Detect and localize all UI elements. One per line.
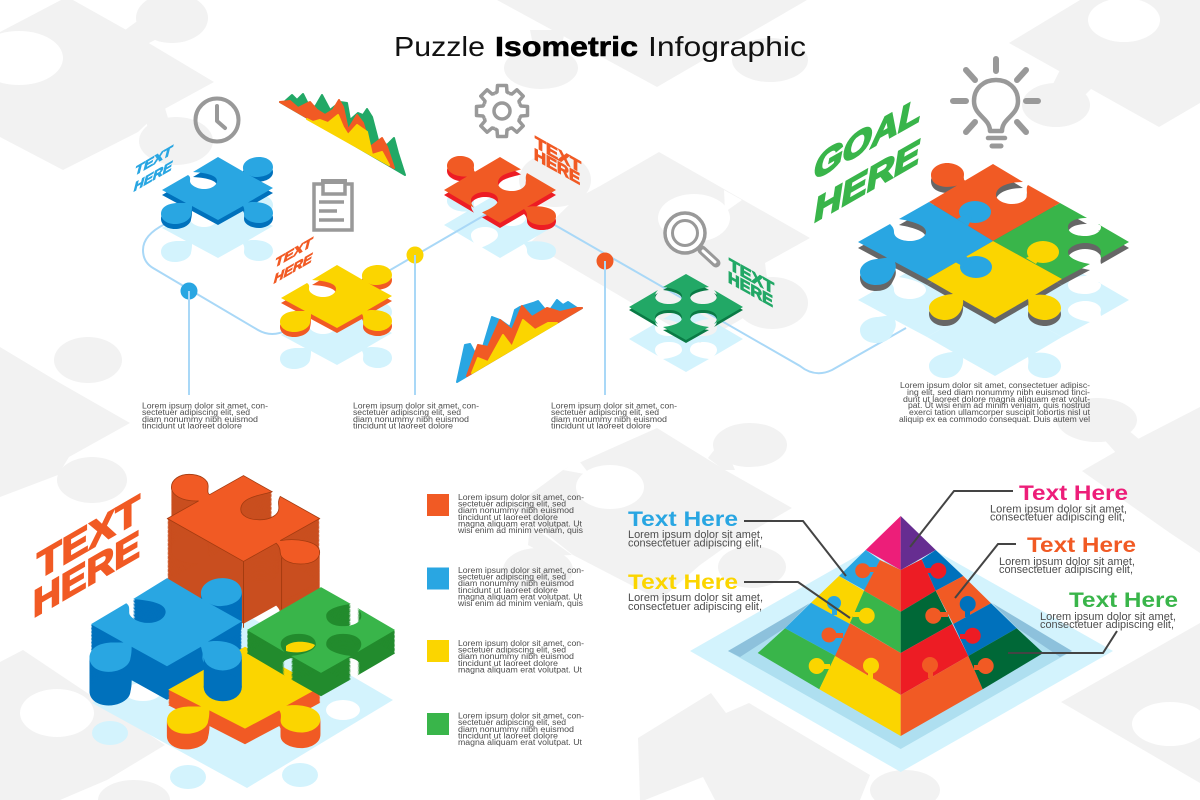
legend: yellow: sectetuer adipiscing elit, sed xyxy=(458,646,566,654)
text block: goal xyxy=(899,381,1091,424)
text block: goal: dunt ut laoreet dolore magna aliquam erat volut- xyxy=(903,395,1090,404)
icon: clock xyxy=(196,98,238,142)
label: orange text here right: HERE xyxy=(534,144,580,188)
icon: magnifier xyxy=(665,213,716,263)
legend: blue: sectetuer adipiscing elit, sed xyxy=(458,572,566,582)
text block: step 1: sectetuer adipiscing elit, sed xyxy=(142,408,250,417)
puzzle piece: green xyxy=(629,274,743,343)
text block: step 1: Lorem ipsum dolor sit amet, con- xyxy=(142,402,268,410)
legend: orange: diam nonummy nibh euismod xyxy=(458,506,574,515)
legend: yellow: diam nonummy nibh euismod xyxy=(458,652,574,661)
callout: yellow: Text Here xyxy=(628,571,738,594)
callout: yellow: consectetuer adipiscing elit, xyxy=(628,601,762,613)
legend: green: magna aliquam erat volutpat. Ut xyxy=(458,738,583,747)
text block: step 3: tincidunt ut laoreet dolore xyxy=(551,422,652,430)
callout: blue: Text Here xyxy=(628,508,738,531)
callout: pink: Text Here xyxy=(1019,482,1128,505)
text block: step 2: sectetuer adipiscing elit, sed xyxy=(353,408,461,417)
text block: step 1: tincidunt ut laoreet dolore xyxy=(142,422,243,430)
timeline marker: orange xyxy=(596,252,614,395)
label: orange text here left: HERE xyxy=(272,250,314,288)
connector path xyxy=(143,205,906,373)
legend: orange: magna aliquam erat volutpat. Ut xyxy=(458,520,583,528)
stack: yellow piece xyxy=(167,647,320,749)
goal heading: GOAL xyxy=(810,87,926,189)
puzzle piece: orange xyxy=(444,156,556,230)
leader lines xyxy=(744,491,1117,653)
text block: step 3: sectetuer adipiscing elit, sed xyxy=(551,408,659,417)
legend: blue: magna aliquam erat volutpat. Ut xyxy=(458,592,583,602)
legend: yellow: magna aliquam erat volutpat. Ut xyxy=(458,666,583,674)
callout: yellow xyxy=(628,571,763,613)
title: Isometric xyxy=(495,31,638,62)
stack heading: HERE xyxy=(33,522,140,626)
stack: yellow showing through green notch xyxy=(286,642,315,652)
legend: blue: tincidunt ut laoreet dolore xyxy=(458,586,559,595)
label: green text here: HERE xyxy=(728,267,773,311)
callout: pink xyxy=(990,482,1128,524)
label: green text here: TEXT xyxy=(729,254,775,298)
callout: green: consectetuer adipiscing elit, xyxy=(1040,619,1174,631)
callout: green: Text Here xyxy=(1069,589,1178,612)
legend: blue: diam nonummy nibh euismod xyxy=(458,579,574,588)
legend: green: Lorem ipsum dolor sit amet, con- xyxy=(458,712,584,720)
stack: orange cube xyxy=(167,474,320,628)
label: blue text here: HERE xyxy=(132,158,174,196)
stack: blue piece xyxy=(89,578,242,706)
icon: light bulb xyxy=(953,59,1038,146)
goal puzzle xyxy=(858,163,1129,326)
stack heading: TEXT xyxy=(37,486,140,588)
label: orange text here right: TEXT xyxy=(535,132,582,177)
legend: green: tincidunt ut laoreet dolore xyxy=(458,732,559,740)
label: blue text here: TEXT xyxy=(133,142,175,180)
text block: step 3 xyxy=(551,402,677,430)
goal heading xyxy=(810,87,926,231)
callout: orange xyxy=(999,534,1136,576)
legend: green xyxy=(427,712,584,747)
text block: step 2: Lorem ipsum dolor sit amet, con- xyxy=(353,402,479,410)
pyramid base xyxy=(690,531,1113,772)
puzzle piece: blue xyxy=(161,157,273,229)
text block: goal: pat. Ut wisi enim ad minim veniam, quis nostrud xyxy=(908,401,1090,410)
text block: goal: Lorem ipsum dolor sit amet, consectetuer adipisc- xyxy=(900,381,1090,390)
goal shadow xyxy=(858,221,1129,378)
icon: clipboard xyxy=(314,179,352,230)
text block: goal: aliquip ex ea commodo consequat. Duis autem vel xyxy=(899,415,1090,424)
goal heading: HERE xyxy=(812,132,923,231)
legend: orange: tincidunt ut laoreet dolore xyxy=(458,513,559,522)
callout: pink: consectetuer adipiscing elit, xyxy=(990,512,1125,524)
legend: yellow xyxy=(427,639,584,674)
text block: step 3: diam nonummy nibh euismod xyxy=(551,415,667,424)
callout: pink: Lorem ipsum dolor sit amet, xyxy=(990,504,1127,516)
timeline marker: blue xyxy=(180,282,198,395)
chart: rising area xyxy=(457,300,582,382)
callout: orange: consectetuer adipiscing elit, xyxy=(999,564,1133,576)
title xyxy=(394,31,806,62)
text block: step 3: Lorem ipsum dolor sit amet, con- xyxy=(551,402,677,410)
piece shadows xyxy=(161,191,743,372)
text block: step 2: tincidunt ut laoreet dolore xyxy=(353,422,454,430)
callout: yellow: Lorem ipsum dolor sit amet, xyxy=(628,592,763,604)
callout: blue xyxy=(628,508,763,550)
label: orange text here left: TEXT xyxy=(273,234,315,272)
icon: gear xyxy=(476,86,528,136)
stack shadow xyxy=(92,615,393,789)
text block: step 2 xyxy=(353,402,479,430)
text block: goal: ing elit, sed diam nonummy nibh euismod tinci- xyxy=(907,388,1090,397)
callout: green: Lorem ipsum dolor sit amet, xyxy=(1040,611,1176,623)
legend: blue xyxy=(427,566,584,608)
legend: blue: wisi enim ad minim veniam, quis xyxy=(457,599,583,608)
legend: orange: wisi enim ad minim veniam, quis xyxy=(457,526,583,535)
legend: orange: sectetuer adipiscing elit, sed xyxy=(458,500,566,508)
timeline marker: yellow xyxy=(406,246,424,395)
text block: step 2: diam nonummy nibh euismod xyxy=(353,415,469,424)
pyramid xyxy=(758,516,1043,736)
callout: orange: Lorem ipsum dolor sit amet, xyxy=(999,556,1135,568)
callout: blue: Lorem ipsum dolor sit amet, xyxy=(628,529,763,541)
legend: orange xyxy=(427,493,584,535)
legend: yellow: tincidunt ut laoreet dolore xyxy=(458,659,559,668)
title: Puzzle xyxy=(394,31,485,62)
legend: blue: Lorem ipsum dolor sit amet, con- xyxy=(458,566,584,575)
callout: blue: consectetuer adipiscing elit, xyxy=(628,538,762,550)
stack: green piece xyxy=(247,587,395,696)
callout: green xyxy=(1040,589,1178,631)
text block: step 1: diam nonummy nibh euismod xyxy=(142,415,258,424)
legend: green: diam nonummy nibh euismod xyxy=(458,725,574,734)
title: Infographic xyxy=(648,31,806,62)
legend: green: sectetuer adipiscing elit, sed xyxy=(458,718,566,727)
callout: orange: Text Here xyxy=(1027,534,1136,557)
puzzle piece: yellow xyxy=(280,265,392,337)
chart: falling area xyxy=(280,94,405,175)
legend: yellow: Lorem ipsum dolor sit amet, con- xyxy=(458,639,584,648)
text block: goal: exerci tation ullamcorper suscipit lobortis nisl ut xyxy=(909,408,1091,417)
stack: blue knob over yellow xyxy=(201,642,242,701)
legend: orange: Lorem ipsum dolor sit amet, con- xyxy=(458,493,584,502)
text block: step 1 xyxy=(142,402,268,430)
